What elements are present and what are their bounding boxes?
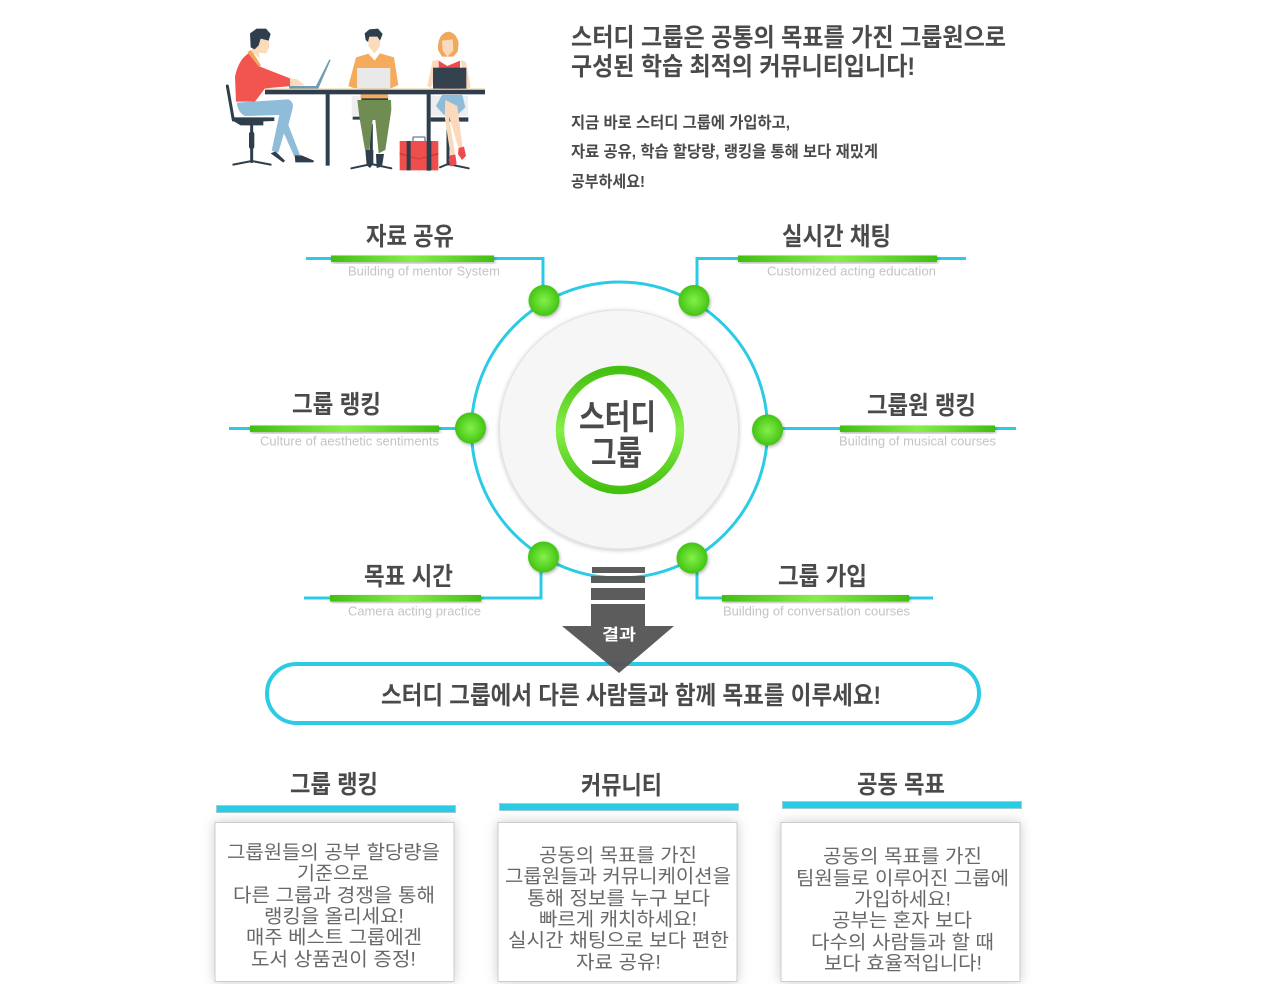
card: 그룹 랭킹: 도서 상품권이 증정! [251, 948, 416, 970]
card: 그룹 랭킹: 매주 베스트 그룹에겐 [246, 926, 422, 948]
topic: 그룹 가입: 그룹 가입 [778, 563, 867, 591]
card: 공동 목표: 팀원들로 이루어진 그룹에 [796, 868, 1009, 890]
illustration: people working at a table [227, 29, 485, 171]
connector lines [229, 258, 1016, 598]
result pill: 스터디 그룹에서 다른 사람들과 함께 목표를 이루세요! [381, 682, 881, 710]
centre badge [560, 370, 680, 490]
intro text [571, 114, 878, 191]
card: 커뮤니티: 자료 공유! [576, 952, 661, 974]
topic: 그룹 랭킹: Culture of aesthetic sentiments [260, 434, 439, 448]
intro heading [571, 24, 1006, 81]
result pill [267, 664, 979, 723]
card: 공동 목표 [781, 771, 1022, 982]
card: 그룹 랭킹: 그룹원들의 공부 할당량을 [227, 842, 440, 864]
topic: 자료 공유: 자료 공유 [366, 223, 454, 251]
topic: 자료 공유 [331, 223, 500, 278]
intro heading: 구성된 학습 최적의 커뮤니티입니다! [571, 53, 915, 81]
topic: 목표 시간: Camera acting practice [348, 604, 481, 618]
card: 그룹 랭킹: 기준으로 [297, 862, 369, 884]
intro heading: 스터디 그룹은 공통의 목표를 가진 그룹원으로 [571, 24, 1006, 52]
card: 공동 목표: 공동 목표 [857, 771, 945, 799]
topic: 자료 공유: Building of mentor System [348, 264, 500, 278]
card: 그룹 랭킹 [215, 771, 456, 982]
card: 그룹 랭킹: 그룹 랭킹 [290, 771, 378, 799]
topic: 그룹 랭킹: 그룹 랭킹 [292, 391, 381, 419]
card: 공동 목표: 공부는 혼자 보다 [832, 910, 972, 932]
card: 커뮤니티: 실시간 채팅으로 보다 편한 [508, 930, 729, 952]
topic: 그룹원 랭킹 [839, 392, 996, 448]
intro text: 공부하세요! [571, 173, 645, 191]
card: 그룹 랭킹: 다른 그룹과 경쟁을 통해 [233, 884, 435, 906]
card: 그룹 랭킹: 랭킹을 올리세요! [264, 906, 404, 928]
card: 공동 목표: 가입하세요! [854, 888, 951, 910]
card: 공동 목표: 보다 효율적입니다! [824, 952, 982, 974]
topic: 그룹원 랭킹: 그룹원 랭킹 [867, 392, 976, 420]
green nodes [455, 285, 783, 574]
topic: 그룹 가입: Building of conversation courses [723, 604, 910, 618]
arrow: result: 결과 [602, 626, 636, 644]
card: 커뮤니티: 그룹원들과 커뮤니케이션을 [505, 866, 731, 888]
topic: 그룹 가입 [722, 563, 910, 618]
topic: 실시간 채팅: Customized acting education [767, 264, 936, 278]
intro text: 자료 공유, 학습 할당량, 랭킹을 통해 보다 재밌게 [571, 143, 878, 161]
card: 커뮤니티: 공동의 목표를 가진 [539, 844, 697, 866]
topic: 실시간 채팅: 실시간 채팅 [782, 223, 891, 251]
topic: 그룹 랭킹 [250, 391, 439, 448]
card: 커뮤니티: 커뮤니티 [581, 772, 662, 800]
arrow: result [562, 567, 674, 673]
card: 커뮤니티: 통해 정보를 누구 보다 [527, 888, 710, 910]
topic: 그룹원 랭킹: Building of musical courses [839, 434, 996, 448]
orbit ring [472, 282, 768, 578]
card: 공동 목표: 다수의 사람들과 할 때 [811, 932, 994, 954]
centre disc [500, 310, 738, 549]
centre badge: 스터디 [579, 399, 656, 437]
topic: 목표 시간: 목표 시간 [364, 563, 453, 591]
card: 커뮤니티 [498, 772, 738, 982]
topic: 실시간 채팅 [738, 223, 937, 278]
card: 공동 목표: 공동의 목표를 가진 [823, 846, 982, 868]
centre badge: 그룹 [591, 435, 642, 473]
card: 커뮤니티: 빠르게 캐치하세요! [539, 908, 697, 930]
topic: 목표 시간 [330, 563, 481, 618]
intro text: 지금 바로 스터디 그룹에 가입하고, [571, 114, 790, 132]
